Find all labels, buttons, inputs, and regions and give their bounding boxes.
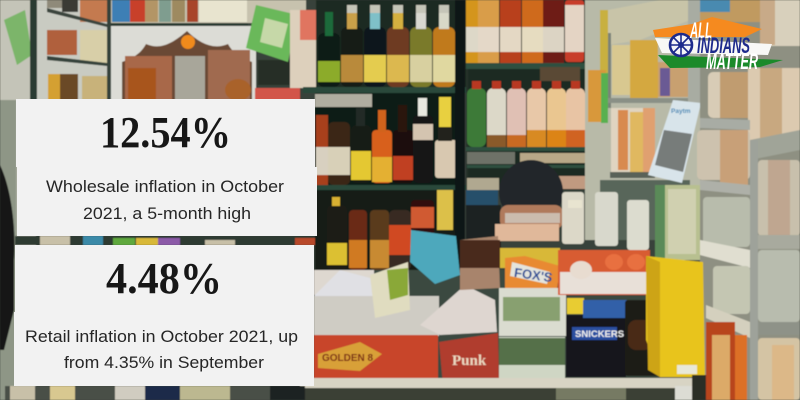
left glass shelving	[0, 0, 111, 400]
shopkeeper	[466, 160, 563, 250]
right bag shelves	[697, 0, 800, 400]
right bottles rows	[466, 0, 590, 206]
text: retail inflation description: from 4.35% in September	[64, 353, 264, 372]
counter goods: GOLDEN 8	[322, 353, 374, 364]
logo wordmark	[689, 18, 758, 74]
text: wholesale inflation description: Wholesale inflation in October	[46, 177, 284, 196]
stat: 12.54%: 12.54%	[100, 108, 231, 157]
panel: retail inflation	[14, 245, 314, 386]
logo: All Indians Matter	[653, 17, 783, 74]
right shelves with boxes	[562, 0, 700, 260]
text: retail inflation description: Retail inflation in October 2021, up	[25, 327, 298, 346]
text: wholesale inflation description	[46, 177, 284, 223]
counter goods: Punk	[452, 353, 487, 369]
strip of goods between and under boxes	[5, 236, 315, 400]
stat: 4.48%: 4.48%	[106, 254, 222, 303]
counter goods: FOX'S	[513, 265, 554, 285]
logo flag brush strokes	[653, 17, 783, 68]
text: wholesale inflation description: 2021, a 5-month high	[83, 204, 251, 223]
logo wordmark: MATTER	[706, 49, 758, 74]
paytm QR card	[648, 100, 701, 183]
paytm QR card: Paytm	[671, 108, 691, 115]
counter goods: SNICKERS	[575, 329, 624, 340]
logo wordmark: ALL	[689, 18, 712, 43]
left bottles rows	[303, 0, 469, 270]
logo ashoka chakra	[670, 34, 692, 56]
top shelf and shrine	[111, 0, 325, 101]
panel: wholesale inflation	[16, 99, 317, 236]
logo wordmark: INDIANS	[697, 33, 750, 58]
text: retail inflation description	[25, 327, 298, 372]
counter goods	[300, 230, 706, 400]
